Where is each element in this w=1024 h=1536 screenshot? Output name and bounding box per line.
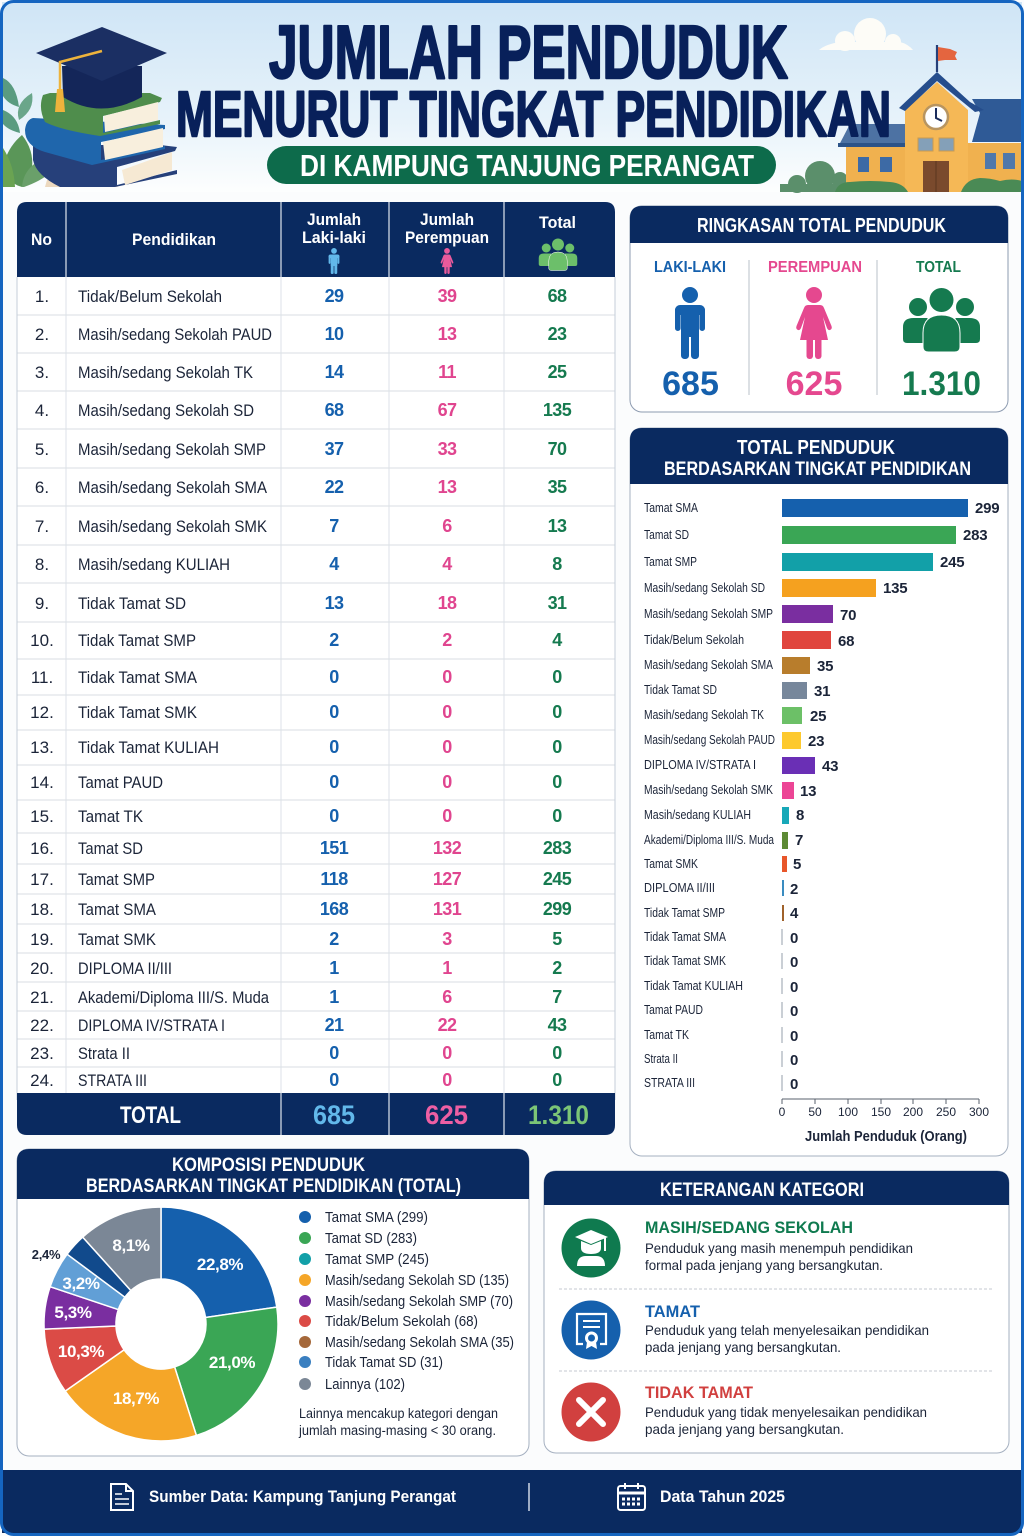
subtitle pill: DI KAMPUNG TANJUNG PERANGAT [300, 148, 754, 183]
column: total values: 0 [552, 702, 562, 722]
panel: data table [17, 202, 615, 1135]
row numbers: 11. [31, 668, 53, 687]
row numbers: 24. [30, 1071, 54, 1090]
column: laki-laki values: 37 [325, 439, 344, 459]
title [176, 10, 891, 150]
bar labels: Masih/sedang KULIAH [644, 808, 751, 822]
legend note: Lainnya mencakup kategori dengan [299, 1406, 498, 1421]
column: laki-laki values: 0 [329, 737, 339, 757]
column: perempuan values: 6 [442, 987, 452, 1007]
table grid [17, 315, 615, 1067]
column: perempuan values [433, 286, 462, 1090]
row labels: Masih/sedang Sekolah SMP [78, 440, 266, 459]
bar values: 283 [963, 527, 987, 544]
bar values: 70 [840, 607, 856, 624]
header banner [2, 2, 1022, 192]
column: total values: 0 [552, 667, 562, 687]
cloud [819, 18, 913, 51]
summary: total [902, 259, 981, 403]
row numbers: 18. [30, 900, 54, 919]
column: perempuan values: 127 [433, 869, 462, 889]
column: perempuan values: 4 [442, 554, 452, 574]
icon: calendar [618, 1483, 645, 1510]
bar values: 0 [790, 954, 798, 971]
bar labels: Masih/sedang Sekolah SD [644, 581, 765, 595]
donut labels: 8,1% [112, 1236, 150, 1255]
column: total values: 31 [548, 593, 567, 613]
bar labels: Masih/sedang Sekolah SMK [644, 783, 774, 797]
left wing [838, 124, 906, 192]
legend: Tidak Tamat SD (31) [325, 1355, 443, 1371]
column: laki-laki values: 2 [329, 630, 339, 650]
table header: No [31, 230, 52, 249]
column: total values: 8 [552, 554, 562, 574]
icon: group [539, 238, 577, 270]
row labels: Tamat SMK [78, 930, 157, 949]
column: total values: 35 [548, 477, 567, 497]
row labels: Tidak Tamat SMP [78, 631, 196, 650]
column: laki-laki values: 2 [329, 929, 339, 949]
column: perempuan values: 0 [442, 772, 452, 792]
column: total values: 70 [548, 439, 567, 459]
chart axis: 150 [871, 1105, 891, 1119]
column: perempuan values: 22 [438, 1015, 457, 1035]
footer [2, 1470, 1022, 1533]
title: JUMLAH PENDUDUK [269, 10, 788, 94]
legend: Tamat SD (283) [325, 1231, 417, 1247]
column: perempuan values: 0 [442, 1043, 452, 1063]
column: perempuan values: 13 [438, 324, 457, 344]
row labels: Tidak Tamat SMK [78, 703, 198, 722]
row numbers [30, 287, 54, 1090]
column: laki-laki values: 0 [329, 702, 339, 722]
icon: document [111, 1484, 133, 1510]
bar labels: Tamat SMA [644, 501, 699, 515]
category: masih/sedang sekolah: Penduduk yang masih menempuh pendidikan [645, 1240, 913, 1256]
summary: laki-laki [654, 259, 726, 403]
column: total values: 13 [548, 516, 567, 536]
chart axis: 250 [936, 1105, 956, 1119]
bar values: 23 [808, 733, 824, 750]
column: laki-laki values: 10 [325, 324, 344, 344]
row labels: Tidak Tamat KULIAH [78, 738, 219, 757]
column: laki-laki values: 22 [325, 477, 344, 497]
legend: Lainnya (102) [325, 1377, 405, 1393]
column: total values [543, 286, 572, 1090]
row numbers: 20. [30, 959, 54, 978]
row numbers: 13. [30, 738, 54, 757]
column: total values: 2 [552, 958, 562, 978]
bar labels: DIPLOMA II/III [644, 881, 715, 895]
bar values: 2 [790, 881, 798, 898]
column: laki-laki values: 0 [329, 772, 339, 792]
bar labels: Tidak Tamat SMA [644, 930, 727, 944]
category: tamat: Penduduk yang telah menyelesaikan pendidikan [645, 1322, 929, 1338]
bar values: 31 [814, 683, 830, 700]
donut labels: 18,7% [113, 1389, 159, 1408]
column: total values: 0 [552, 1070, 562, 1090]
donut labels [32, 1236, 255, 1408]
chart axis: 100 [838, 1105, 858, 1119]
column: perempuan values: 67 [438, 400, 457, 420]
category: tamat [562, 1300, 929, 1360]
row labels: Akademi/Diploma III/S. Muda [78, 988, 269, 1007]
column: laki-laki values [320, 286, 349, 1090]
row labels: Tamat SD [78, 839, 143, 858]
column: perempuan values: 2 [442, 630, 452, 650]
icon: female [441, 248, 453, 274]
summary: perempuan: PEREMPUAN [768, 259, 862, 276]
row numbers: 3. [35, 363, 49, 382]
row numbers: 19. [30, 930, 54, 949]
panel: bar chart total penduduk [630, 428, 1008, 1156]
bar labels: DIPLOMA IV/STRATA I [644, 758, 756, 772]
column: perempuan values: 132 [433, 838, 462, 858]
bar labels: Masih/sedang Sekolah SMP [644, 607, 773, 621]
illustration: plants left [3, 78, 62, 187]
bar labels: Tidak Tamat SMK [644, 954, 727, 968]
donut labels: 3,2% [62, 1274, 100, 1293]
legend note: jumlah masing-masing < 30 orang. [298, 1423, 496, 1438]
table header: Laki-laki [302, 228, 366, 247]
bar values: 299 [975, 500, 999, 517]
blue book [25, 118, 165, 165]
bar values: 0 [790, 979, 798, 996]
column: total values: 7 [552, 987, 562, 1007]
row numbers: 4. [35, 401, 49, 420]
row numbers: 17. [30, 870, 54, 889]
bar values: 5 [793, 856, 801, 873]
front bushes [835, 178, 1022, 192]
row labels: Tidak Tamat SMA [78, 668, 198, 687]
column: laki-laki values: 68 [325, 400, 344, 420]
chart axis: Jumlah Penduduk (Orang) [805, 1129, 967, 1145]
column: laki-laki values: 1 [329, 958, 339, 978]
row numbers: 21. [30, 988, 54, 1007]
bar labels: Tamat SMK [644, 857, 699, 871]
bar values: 135 [883, 580, 907, 597]
column: total values: 23 [548, 324, 567, 344]
bar values: 0 [790, 1076, 798, 1093]
legend: Masih/sedang Sekolah SMA (35) [325, 1335, 514, 1351]
row numbers: 12. [30, 703, 54, 722]
column: total values: 68 [548, 286, 567, 306]
bar labels [644, 501, 775, 1090]
category: masih/sedang sekolah: MASIH/SEDANG SEKOLAH [645, 1218, 853, 1237]
column: laki-laki values: 1 [329, 987, 339, 1007]
donut labels: 2,4% [32, 1247, 61, 1262]
bar values: 245 [940, 554, 964, 571]
column: perempuan values: 0 [442, 1070, 452, 1090]
summary: laki-laki: LAKI-LAKI [654, 259, 726, 276]
total row: 625 [425, 1100, 468, 1130]
column: laki-laki values: 21 [325, 1015, 344, 1035]
column: perempuan values: 39 [438, 286, 457, 306]
column: laki-laki values: 4 [329, 554, 339, 574]
illustration: school building [780, 45, 1022, 193]
row numbers: 1. [35, 287, 49, 306]
table header: Total [539, 213, 576, 232]
bar labels: STRATA III [644, 1076, 695, 1090]
bar values: 35 [817, 658, 833, 675]
column: perempuan values: 3 [442, 929, 452, 949]
panel: komposisi penduduk [17, 1149, 529, 1456]
row labels: Tidak Tamat SD [78, 594, 186, 613]
illustration: book stack with graduation cap [25, 27, 177, 187]
row labels: Tamat SMA [78, 900, 157, 919]
column: laki-laki values: 0 [329, 667, 339, 687]
column: laki-laki values: 0 [329, 806, 339, 826]
table header: Pendidikan [132, 230, 216, 249]
row numbers: 2. [35, 325, 49, 344]
panel: ringkasan total penduduk: RINGKASAN TOTAL PENDUDUK [697, 215, 946, 237]
chart axis: 50 [808, 1105, 822, 1119]
bar labels: Tidak/Belum Sekolah [644, 633, 744, 647]
bar values: 25 [810, 708, 826, 725]
row labels: DIPLOMA IV/STRATA I [78, 1016, 225, 1035]
bar labels: Tidak Tamat KULIAH [644, 979, 743, 993]
column: total values: 0 [552, 772, 562, 792]
bar values: 0 [790, 1028, 798, 1045]
column: perempuan values: 33 [438, 439, 457, 459]
row numbers: 14. [30, 773, 54, 792]
column: laki-laki values: 0 [329, 1070, 339, 1090]
column: perempuan values: 0 [442, 667, 452, 687]
bar values [790, 500, 999, 1093]
column: laki-laki values: 151 [320, 838, 349, 858]
row labels: Tamat TK [78, 807, 144, 826]
bar labels: Tamat TK [644, 1028, 690, 1042]
legend: Tamat SMA (299) [325, 1210, 428, 1226]
row numbers: 9. [35, 594, 49, 613]
chart axis: 300 [969, 1105, 989, 1119]
chart axis: 200 [903, 1105, 923, 1119]
column: total values: 0 [552, 806, 562, 826]
column: perempuan values: 0 [442, 702, 452, 722]
category: masih/sedang sekolah [562, 1218, 913, 1278]
row numbers: 10. [30, 631, 54, 650]
bar labels: Akademi/Diploma III/S. Muda [644, 833, 774, 847]
column: perempuan values: 131 [433, 899, 462, 919]
row numbers: 8. [35, 555, 49, 574]
bar labels: Tamat SMP [644, 555, 697, 569]
column: total values: 4 [552, 630, 562, 650]
category: tidak tamat: Penduduk yang tidak menyelesaikan pendidikan [645, 1404, 927, 1420]
row labels: Masih/sedang Sekolah SMK [78, 517, 268, 536]
legend: Masih/sedang Sekolah SMP (70) [325, 1294, 513, 1310]
panel: komposisi penduduk: KOMPOSISI PENDUDUK [172, 1155, 365, 1176]
column: laki-laki values: 29 [325, 286, 344, 306]
legend note [298, 1406, 498, 1438]
row numbers: 7. [35, 517, 49, 536]
total row [17, 1093, 615, 1135]
donut labels: 22,8% [197, 1255, 243, 1274]
category: tamat: TAMAT [645, 1302, 701, 1321]
column: perempuan values: 1 [442, 958, 452, 978]
row labels: Masih/sedang Sekolah TK [78, 363, 254, 382]
total row: 1.310 [528, 1100, 589, 1130]
column: total values: 5 [552, 929, 562, 949]
row numbers: 6. [35, 478, 49, 497]
row numbers: 15. [30, 807, 54, 826]
panel: keterangan kategori: KETERANGAN KATEGORI [660, 1180, 864, 1201]
row numbers: 23. [30, 1044, 54, 1063]
bar values: 0 [790, 1052, 798, 1069]
graduation cap [36, 27, 167, 112]
bar values: 8 [796, 807, 804, 824]
bar labels: Strata II [644, 1052, 678, 1066]
table header: Jumlah [420, 210, 474, 229]
bar labels: Masih/sedang Sekolah TK [644, 708, 765, 722]
table header: Jumlah [307, 210, 361, 229]
summary: perempuan [768, 259, 862, 403]
column: laki-laki values: 168 [320, 899, 349, 919]
row numbers: 16. [30, 839, 54, 858]
column: total values: 0 [552, 1043, 562, 1063]
row labels: Masih/sedang Sekolah PAUD [78, 325, 272, 344]
table header [17, 202, 615, 277]
green book [41, 93, 162, 136]
row labels: Masih/sedang Sekolah SD [78, 401, 254, 420]
bar values: 4 [790, 905, 799, 922]
total row: 685 [313, 1100, 355, 1130]
panel: bar chart total penduduk: BERDASARKAN TINGKAT PENDIDIKAN [664, 459, 971, 480]
year text: Data Tahun 2025 [660, 1487, 785, 1506]
navy book [33, 145, 177, 187]
bar values: 68 [838, 633, 854, 650]
row labels: Masih/sedang KULIAH [78, 555, 230, 574]
bar values: 43 [822, 758, 838, 775]
column: total values: 135 [543, 400, 572, 420]
donut labels: 21,0% [209, 1353, 255, 1372]
legend: Tidak/Belum Sekolah (68) [325, 1314, 478, 1330]
category: masih/sedang sekolah: formal pada jenjang yang bersangkutan. [645, 1257, 883, 1273]
back bush [780, 161, 850, 193]
column: perempuan values: 11 [438, 362, 456, 382]
bar labels: Tidak Tamat SMP [644, 906, 725, 920]
chart axis: 0 [779, 1105, 786, 1119]
row labels: Strata II [78, 1044, 130, 1063]
bars [782, 499, 968, 1091]
legend: Tamat SMP (245) [325, 1252, 429, 1268]
panel: ringkasan total penduduk [630, 206, 1008, 412]
column: total values: 299 [543, 899, 572, 919]
column: total values: 0 [552, 737, 562, 757]
bar values: 7 [795, 832, 803, 849]
row numbers: 22. [30, 1016, 54, 1035]
column: laki-laki values: 118 [320, 869, 348, 889]
category: tidak tamat: TIDAK TAMAT [645, 1383, 754, 1402]
column: total values: 283 [543, 838, 572, 858]
bar labels: Masih/sedang Sekolah PAUD [644, 733, 775, 747]
panel: komposisi penduduk: BERDASARKAN TINGKAT PENDIDIKAN (TOTAL) [86, 1176, 461, 1197]
bar labels: Tamat SD [644, 528, 689, 542]
donut labels: 5,3% [54, 1303, 92, 1322]
bar labels: Masih/sedang Sekolah SMA [644, 658, 774, 672]
table header: Perempuan [405, 228, 489, 247]
column: perempuan values: 18 [438, 593, 457, 613]
donut chart [44, 1207, 278, 1441]
column: perempuan values: 13 [438, 477, 457, 497]
row labels: DIPLOMA II/III [78, 959, 172, 978]
row numbers: 5. [35, 440, 49, 459]
column: perempuan values: 0 [442, 737, 452, 757]
row labels [78, 287, 272, 1090]
column: total values: 245 [543, 869, 572, 889]
tower [899, 72, 984, 192]
column: laki-laki values: 14 [325, 362, 344, 382]
flag [937, 45, 957, 72]
summary: total: TOTAL [916, 259, 961, 276]
chart axis [779, 1099, 989, 1145]
summary: total: 1.310 [902, 365, 981, 403]
panel: bar chart total penduduk: TOTAL PENDUDUK [737, 437, 895, 459]
legend [299, 1210, 514, 1393]
row labels: Masih/sedang Sekolah SMA [78, 478, 268, 497]
column: total values: 43 [548, 1015, 567, 1035]
icon: male [329, 248, 339, 274]
panel: keterangan kategori [544, 1171, 1009, 1453]
column: total values: 25 [548, 362, 567, 382]
category: tidak tamat [562, 1382, 927, 1442]
column: perempuan values: 0 [442, 806, 452, 826]
total row: TOTAL [120, 1102, 181, 1129]
category: tamat: pada jenjang yang bersangkutan. [645, 1339, 841, 1355]
summary: perempuan: 625 [786, 365, 842, 403]
bar values: 0 [790, 930, 798, 947]
category: tidak tamat: pada jenjang yang bersangkutan. [645, 1421, 844, 1437]
bar values: 13 [800, 783, 816, 800]
row labels: Tidak/Belum Sekolah [78, 287, 222, 306]
bar values: 0 [790, 1003, 798, 1020]
legend: Masih/sedang Sekolah SD (135) [325, 1273, 509, 1289]
bar labels: Tidak Tamat SD [644, 683, 717, 697]
column: laki-laki values: 0 [329, 1043, 339, 1063]
donut labels: 10,3% [58, 1342, 104, 1361]
source text: Sumber Data: Kampung Tanjung Perangat [149, 1487, 456, 1506]
row labels: STRATA III [78, 1071, 147, 1090]
column: laki-laki values: 13 [325, 593, 344, 613]
right wing [968, 99, 1022, 192]
row labels: Tamat SMP [78, 870, 155, 889]
column: laki-laki values: 7 [329, 516, 339, 536]
row labels: Tamat PAUD [78, 773, 163, 792]
summary: laki-laki: 685 [662, 365, 719, 403]
bar labels: Tamat PAUD [644, 1003, 703, 1017]
column: perempuan values: 6 [442, 516, 452, 536]
